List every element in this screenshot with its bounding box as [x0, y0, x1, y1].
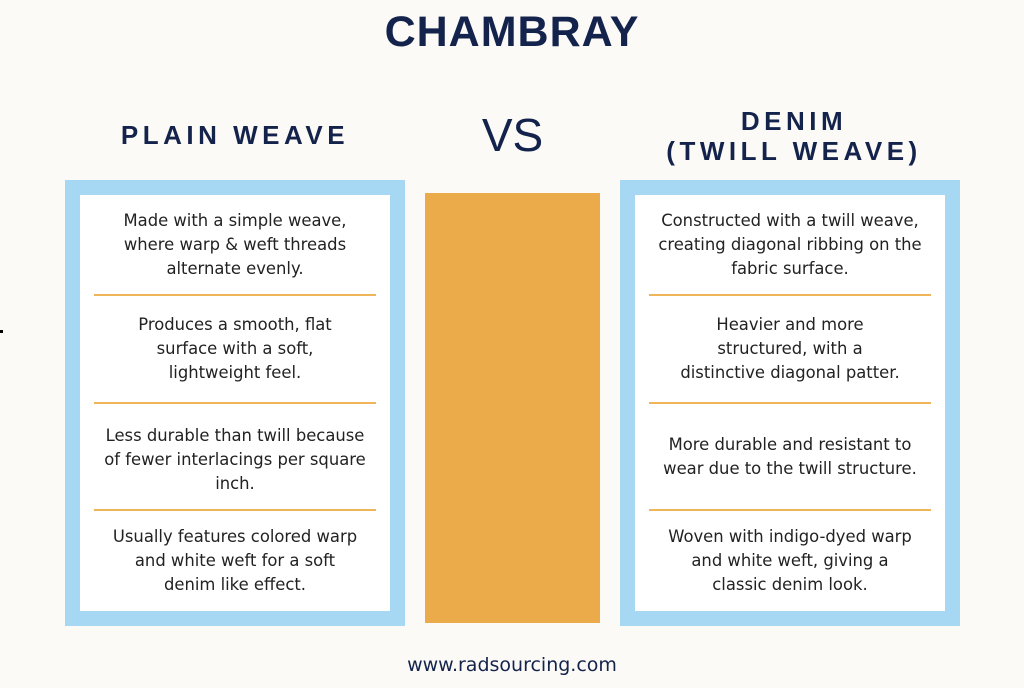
text: point 1: Made with a simple weave, [124, 211, 346, 230]
panel: plain weave [65, 180, 405, 626]
heading: vs: VS [482, 109, 543, 161]
text: point 1: fabric surface. [731, 259, 849, 278]
footer url: www.radsourcing.com [407, 654, 617, 676]
text: point 1: Constructed with a twill weave, [661, 211, 919, 230]
text: point 4 [113, 526, 357, 594]
text: point 3: of fewer interlacings per square [104, 450, 366, 468]
text: point 2: distinctive diagonal patter. [680, 363, 900, 382]
text: point 4: Usually features colored warp [113, 526, 357, 546]
text: point 1: where warp & weft threads [124, 235, 346, 254]
heading: denim [666, 106, 922, 166]
text: point 4: and white weft for a soft [135, 550, 335, 570]
panel: denim [620, 180, 960, 626]
text: point 2: structured, with a [717, 339, 863, 358]
text: point 3: Less durable than twill because [106, 426, 364, 444]
text: point 3: inch. [215, 474, 255, 492]
text: point 4: Woven with indigo-dyed warp [668, 526, 912, 546]
heading: plain weave: PLAIN WEAVE [121, 120, 349, 150]
text: point 4 [668, 526, 912, 594]
marker dot [0, 330, 3, 333]
text: point 1 [658, 211, 922, 278]
text: point 2: lightweight feel. [169, 363, 301, 382]
center orange bar [425, 193, 600, 623]
text: point 3 [104, 426, 366, 492]
text: point 4: denim like effect. [164, 574, 306, 594]
text: point 1: creating diagonal ribbing on the [658, 235, 922, 254]
text: point 2 [138, 315, 332, 382]
text: point 3 [663, 434, 917, 478]
text: point 2: Heavier and more [716, 315, 864, 334]
text: point 2: Produces a smooth, flat [138, 315, 332, 334]
text: point 3: wear due to the twill structure. [663, 458, 917, 478]
title: CHAMBRAY [385, 8, 639, 56]
heading: denim: DENIM [741, 106, 847, 136]
text: point 2: surface with a soft, [157, 339, 313, 358]
text: point 3: More durable and resistant to [669, 434, 911, 454]
text: point 2 [680, 315, 900, 382]
text: point 1: alternate evenly. [166, 259, 304, 278]
text: point 4: classic denim look. [712, 574, 868, 594]
text: point 1 [124, 211, 346, 278]
text: point 4: and white weft, giving a [691, 550, 889, 570]
heading: denim: (TWILL WEAVE) [666, 136, 922, 166]
